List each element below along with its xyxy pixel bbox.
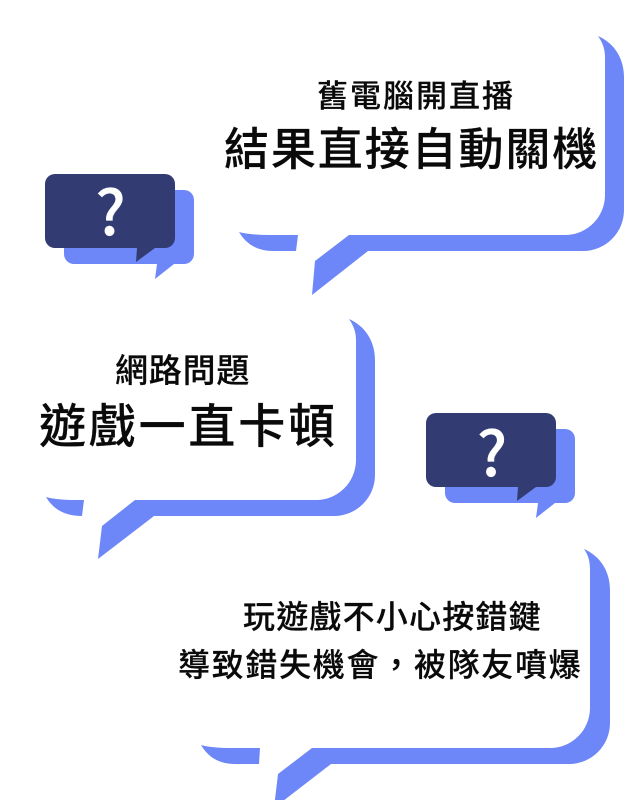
icon question mark: ? [477, 404, 507, 494]
bubble shadow shape [201, 549, 610, 800]
icon question mark: ? [95, 163, 126, 253]
bubble shadow shape [239, 36, 624, 295]
icon: question bubbles left [45, 163, 194, 279]
bubble shadow shape [46, 319, 375, 559]
icon front bubble [426, 413, 556, 501]
text: old computer streaming: 舊電腦開直播 [317, 79, 515, 114]
text: missed chance line two: 導致錯失機會，被隊友噴爆 [178, 647, 582, 683]
icon front bubble [45, 174, 175, 262]
text: game keeps lagging: 遊戲一直卡頓 [39, 400, 338, 453]
icon back bubble [445, 429, 575, 518]
text: shuts down directly: 結果直接自動關機 [224, 124, 599, 175]
speech bubble: network problem [39, 319, 375, 559]
icon back bubble [64, 190, 194, 279]
text: network problem: 網路問題 [115, 352, 250, 389]
text: pressed wrong key line one: 玩遊戲不小心按錯鍵 [243, 599, 542, 635]
speech bubble: pressed wrong key [178, 549, 610, 800]
speech bubble: computer shuts down [224, 36, 624, 295]
icon: question bubbles right [426, 404, 575, 518]
